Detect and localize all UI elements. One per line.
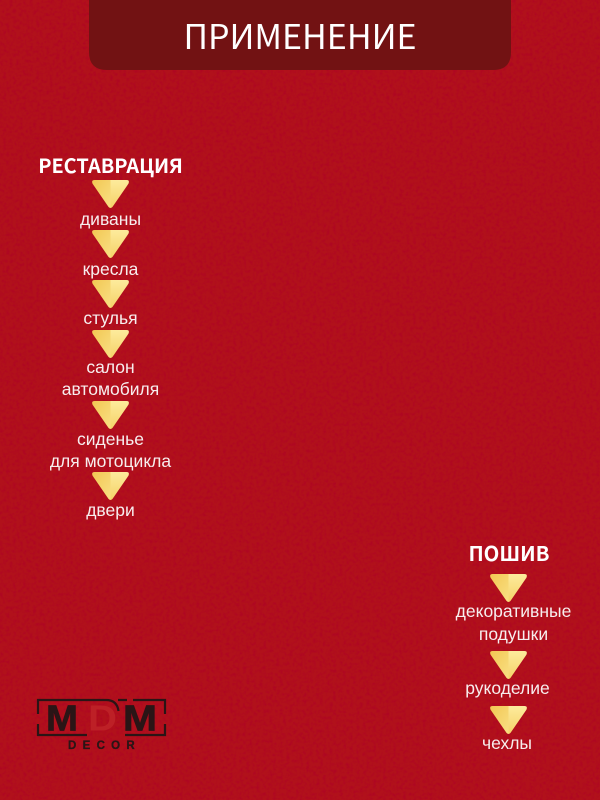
text: chairs: стулья (83, 308, 138, 328)
title: ПРИМЕНЕНИЕ (183, 10, 417, 59)
text: motorcycle seat: для мотоцикла (50, 451, 171, 471)
icon: arrow 5 (92, 401, 129, 429)
text: armchairs: кресла (83, 259, 139, 279)
text: covers: чехлы (482, 733, 532, 753)
panel: sewing list (456, 537, 571, 753)
heading: restoration: РЕСТАВРАЦИЯ (38, 150, 183, 179)
logo: MDM Decor: D (88, 698, 117, 738)
logo: MDM Decor (38, 698, 165, 752)
text: needlework: рукоделие (465, 678, 550, 698)
icon: arrow 4 (92, 330, 129, 358)
icon: arrow 1 (92, 180, 129, 208)
icon: arrow 2 (92, 230, 129, 258)
icon: arrow 9 (490, 706, 527, 734)
title banner (89, 0, 511, 70)
text: decorative pillows: подушки (479, 624, 548, 644)
text: car interior: автомобиля (62, 379, 159, 399)
logo: MDM Decor: M (123, 698, 157, 738)
icon: arrow 3 (92, 280, 129, 308)
logo: MDM Decor: DECOR (68, 740, 141, 752)
icon: arrow 8 (490, 651, 527, 679)
text: sofas: диваны (80, 209, 141, 229)
icon: arrow 6 (92, 472, 129, 500)
icon: arrow 7 (490, 574, 527, 602)
text: car interior: салон (86, 357, 135, 377)
text: decorative pillows: декоративные (456, 601, 571, 621)
panel: restoration list (38, 150, 183, 520)
text: motorcycle seat: сиденье (77, 429, 144, 449)
logo: MDM Decor: M (46, 698, 78, 738)
heading: sewing: ПОШИВ (468, 537, 550, 567)
text: doors: двери (86, 500, 135, 520)
